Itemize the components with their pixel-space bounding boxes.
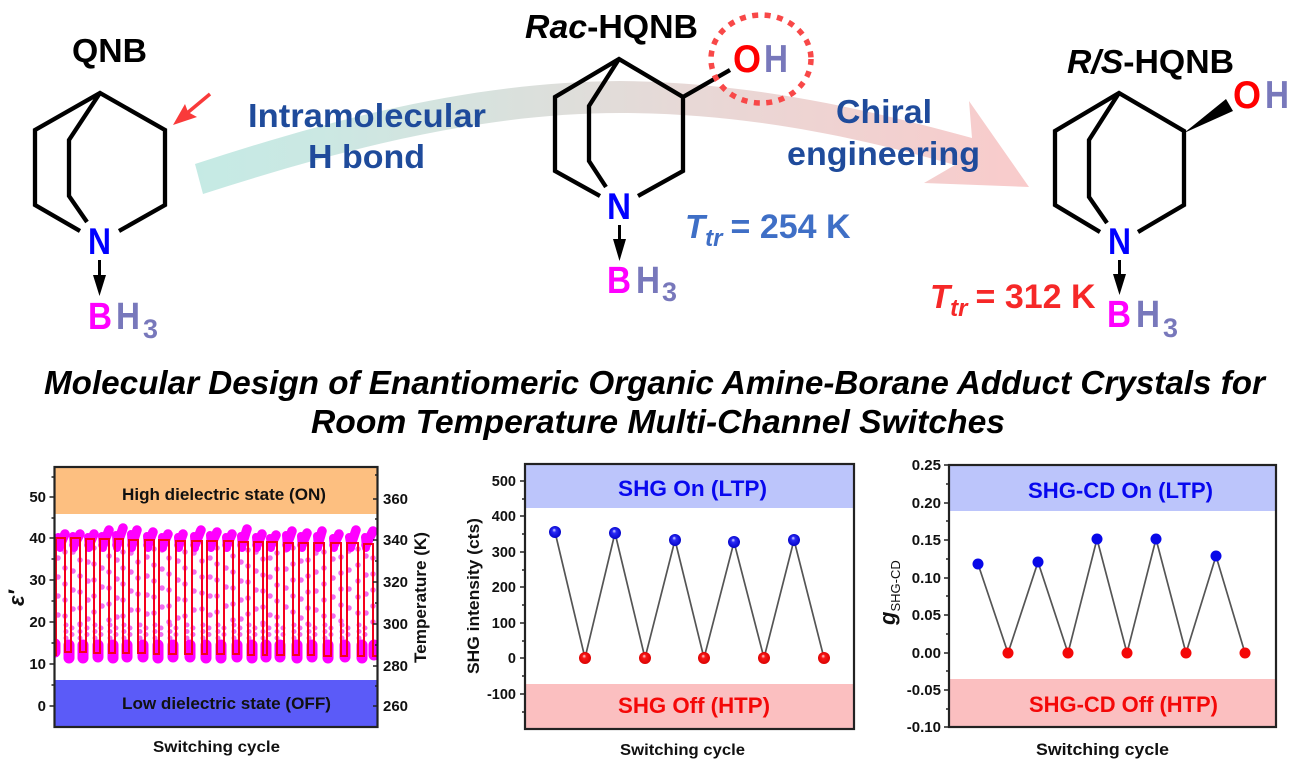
axis frame bbox=[54, 467, 378, 727]
arrowhead of red arrow bbox=[173, 104, 197, 125]
text: Ttr 254 K: tr bbox=[705, 225, 724, 252]
high state points bbox=[972, 534, 1222, 570]
BH3 group: B bbox=[607, 260, 631, 302]
y axis labels: 0.00 bbox=[912, 645, 941, 662]
left y axis labels: 20 bbox=[29, 614, 46, 631]
panel: SHG-CD switching chart bbox=[875, 457, 1276, 759]
panel: dielectric switching chart bbox=[4, 467, 430, 756]
cage bonds bbox=[555, 59, 730, 196]
band label: SHG-CD off: SHG-CD Off (HTP) bbox=[1029, 692, 1218, 717]
cage bonds bbox=[35, 93, 165, 231]
left y axis labels: 10 bbox=[29, 656, 46, 673]
x axis title: Switching cycle bbox=[620, 742, 745, 759]
y axis title: SHG-CD bbox=[888, 560, 903, 612]
y axis labels: 0.15 bbox=[912, 532, 941, 549]
text: Ttr 312 K: T bbox=[930, 278, 953, 315]
title: Room Temperature Multi-Channel Switches bbox=[311, 403, 1005, 440]
y axis labels: 0.20 bbox=[912, 495, 941, 512]
molecule: Rac-HQNB bbox=[525, 8, 811, 307]
right y axis labels: 280 bbox=[383, 658, 408, 675]
title: Molecular Design of Enantiomeric Organic Amine-Borane Adduct Crystals for bbox=[44, 364, 1267, 401]
label: Rac-HQNB: Rac-HQNB bbox=[525, 8, 698, 45]
left y axis labels bbox=[29, 489, 46, 715]
icon: red arrow pointing at carbon bbox=[186, 94, 210, 114]
text: Ttr 312 K: tr bbox=[950, 295, 969, 322]
text: intramolecular H bond bbox=[248, 97, 486, 175]
x axis title: Switching cycle bbox=[153, 739, 280, 756]
band label: low: Low dielectric state (OFF) bbox=[122, 694, 331, 713]
right y axis labels: 340 bbox=[383, 532, 408, 549]
y axis labels: 0.25 bbox=[912, 457, 941, 474]
BH3 group: B bbox=[1107, 294, 1131, 336]
text: intramolecular H bond: Intramolecular bbox=[248, 97, 486, 134]
axis ticks bbox=[50, 475, 378, 706]
y axis title: g bbox=[875, 611, 900, 626]
dielectric data bbox=[55, 528, 378, 658]
panel: SHG switching chart bbox=[464, 464, 854, 759]
molecule: R/S-HQNB bbox=[1055, 43, 1289, 343]
y axis labels: 0 bbox=[508, 651, 516, 667]
band label: SHG on: SHG On (LTP) bbox=[618, 476, 767, 501]
low state points bbox=[1002, 648, 1250, 658]
right y axis labels: 320 bbox=[383, 574, 408, 591]
SHG-CD off band bbox=[949, 679, 1276, 727]
y axis labels: 300 bbox=[492, 545, 516, 561]
curved arrow: intramolecular H bond to chiral engineering bbox=[195, 81, 1029, 194]
molecule: R/S-HQNB: H bbox=[1136, 294, 1160, 336]
band label: high: High dielectric state (ON) bbox=[122, 485, 326, 504]
molecule: Rac-HQNB: 3 bbox=[662, 277, 677, 307]
atom: N: N bbox=[1108, 221, 1131, 262]
y axis labels bbox=[487, 474, 516, 703]
right axis title: Temperature (K) bbox=[411, 532, 430, 663]
SHG on band bbox=[525, 464, 854, 508]
molecule: QNB bbox=[35, 32, 165, 344]
y axis labels: 100 bbox=[492, 616, 516, 632]
y axis title: SHG intensity (cts) bbox=[464, 518, 483, 674]
atom: N: N bbox=[88, 221, 111, 262]
axis ticks bbox=[520, 481, 525, 712]
axis frame bbox=[525, 464, 854, 729]
y axis labels: 200 bbox=[492, 580, 516, 596]
connecting line bbox=[978, 539, 1245, 653]
molecule: QNB: 3 bbox=[143, 314, 158, 344]
connecting line bbox=[555, 532, 824, 658]
x axis title: Switching cycle bbox=[1036, 740, 1169, 759]
y axis labels: 400 bbox=[492, 509, 516, 525]
axis ticks bbox=[944, 465, 949, 727]
molecule: Rac-HQNB: H bbox=[636, 260, 660, 302]
y axis labels: 0.10 bbox=[912, 570, 941, 587]
SHG-CD on band bbox=[949, 465, 1276, 511]
y axis labels: 500 bbox=[492, 474, 516, 490]
y axis labels: 0.05 bbox=[912, 607, 941, 624]
title bbox=[44, 364, 1267, 440]
axis frame bbox=[949, 465, 1276, 727]
high state points bbox=[549, 526, 800, 548]
wedge bond bbox=[1184, 99, 1233, 133]
right y axis labels: 300 bbox=[383, 616, 408, 633]
dative arrow bbox=[613, 225, 626, 261]
left y axis labels: 30 bbox=[29, 572, 46, 589]
text: chiral engineering: engineering bbox=[787, 135, 980, 172]
label: QNB: QNB bbox=[72, 32, 147, 69]
molecule: R/S-HQNB: 3 bbox=[1163, 313, 1178, 343]
left y axis labels: 0 bbox=[38, 698, 46, 715]
y axis labels: -0.05 bbox=[907, 682, 941, 699]
dative arrow bbox=[93, 260, 106, 296]
molecule: QNB: H bbox=[116, 296, 140, 338]
hydroxyl group OH: O bbox=[733, 38, 761, 81]
cage bonds bbox=[1055, 93, 1184, 232]
left axis title: ε′ bbox=[4, 588, 29, 606]
text: chiral engineering bbox=[787, 93, 980, 172]
text: intramolecular H bond: H bond bbox=[308, 138, 425, 175]
right y axis labels: 360 bbox=[383, 491, 408, 508]
text: Ttr 254 K: = 254 K bbox=[731, 208, 851, 246]
y axis labels bbox=[907, 457, 941, 736]
label: R/S-HQNB: R/S-HQNB bbox=[1067, 43, 1234, 80]
text: Ttr 312 K: = 312 K bbox=[976, 278, 1096, 316]
right y axis labels bbox=[383, 491, 408, 715]
y axis labels: -0.10 bbox=[907, 719, 941, 736]
high dielectric band bbox=[55, 468, 377, 514]
molecule: Rac-HQNB: H bbox=[764, 38, 788, 81]
temperature square wave bbox=[56, 538, 378, 656]
y axis labels: -100 bbox=[487, 687, 516, 703]
left y axis labels: 50 bbox=[29, 489, 46, 506]
low dielectric band bbox=[55, 680, 377, 727]
low state points bbox=[579, 652, 830, 664]
band label: SHG off: SHG Off (HTP) bbox=[618, 693, 770, 718]
SHG off band bbox=[525, 684, 854, 729]
hydroxyl group OH: O bbox=[1233, 74, 1261, 117]
atom: N: N bbox=[607, 186, 631, 227]
left y axis labels: 40 bbox=[29, 530, 46, 547]
band label: SHG-CD on: SHG-CD On (LTP) bbox=[1028, 478, 1213, 503]
molecule: R/S-HQNB: H bbox=[1265, 74, 1289, 117]
BH3 group: B bbox=[88, 296, 112, 338]
text: chiral engineering: Chiral bbox=[836, 93, 932, 130]
right y axis labels: 260 bbox=[383, 698, 408, 715]
text: Ttr 254 K: T bbox=[685, 208, 708, 245]
dative arrow bbox=[1113, 260, 1126, 295]
dotted highlight circle bbox=[711, 15, 811, 103]
